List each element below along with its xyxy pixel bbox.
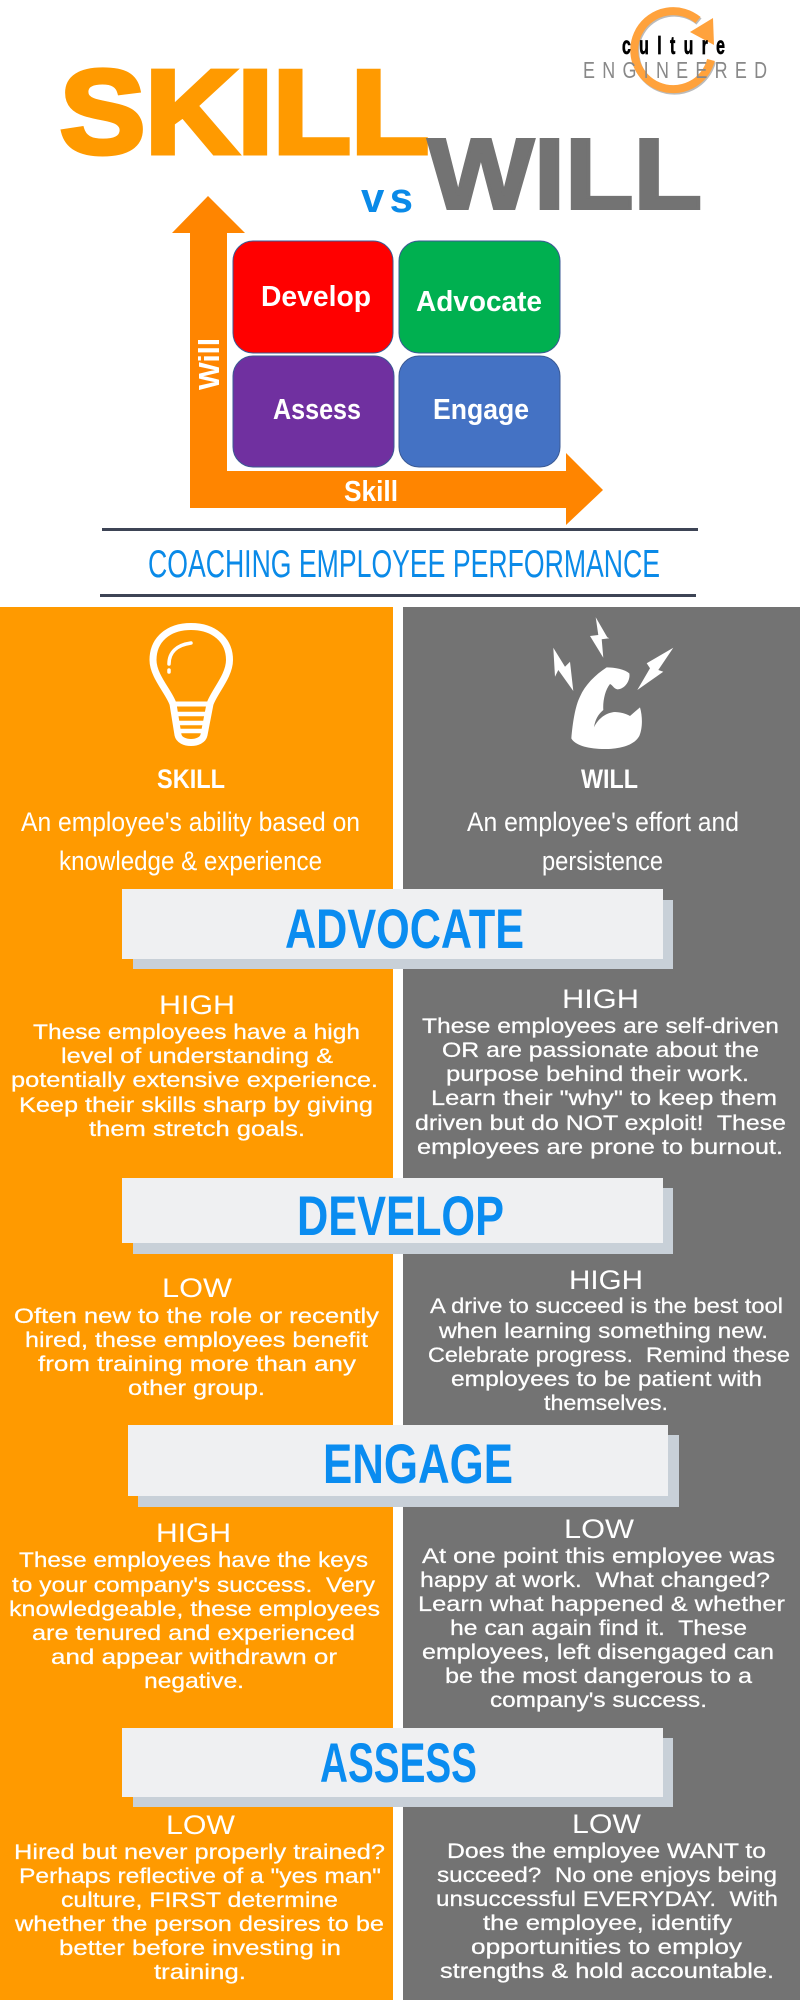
- text: develop will high: A drive to succeed is the best tool: [430, 1294, 783, 1318]
- text: engage will low: company's success.: [490, 1688, 707, 1712]
- text: assess will low: succeed? No one enjoys being: [437, 1863, 777, 1887]
- text: advocate will high: These employees are self-driven: [422, 1014, 779, 1038]
- text: assess will low: the employee, identify: [483, 1911, 732, 1935]
- text: engage will low: he can again find it. These: [450, 1616, 747, 1640]
- text: advocate skill high: them stretch goals.: [89, 1117, 305, 1141]
- banner: ASSESS: ASSESS: [320, 1731, 477, 1794]
- text: develop will high: when learning something new.: [438, 1319, 768, 1343]
- text: advocate will high: purpose behind their work.: [446, 1062, 749, 1086]
- title: WILL: WILL: [428, 118, 702, 230]
- text: engage skill high: are tenured and experienced: [32, 1621, 355, 1645]
- text: assess will low: opportunities to employ: [471, 1935, 742, 1959]
- text: skill definition: knowledge & experience: [59, 846, 322, 876]
- banner: ASSESS: [122, 1728, 673, 1807]
- text: engage will low: employees, left disengaged can: [422, 1640, 774, 1664]
- text: skill definition: An employee's ability based on: [21, 807, 360, 837]
- text: develop skill low: other group.: [128, 1376, 265, 1400]
- title: SKILL: SKILL: [60, 46, 429, 179]
- quadrant: Advocate: [399, 241, 560, 353]
- text: assess skill low: culture, FIRST determine: [61, 1888, 338, 1912]
- text: develop skill low: from training more than any: [38, 1352, 356, 1376]
- text: assess skill low: [14, 1810, 385, 1984]
- text: assess skill low: Perhaps reflective of a "yes man": [19, 1864, 381, 1888]
- text: develop will high: Celebrate progress. Remind these: [428, 1343, 790, 1367]
- text: engage skill high: [9, 1518, 380, 1693]
- icon: light bulb: [153, 626, 230, 742]
- text: engage will low: LOW: [564, 1514, 635, 1544]
- text: engage will low: happy at work. What changed?: [420, 1568, 770, 1592]
- text: engage skill high: and appear withdrawn or: [51, 1645, 337, 1669]
- text: engage will low: be the most dangerous to a: [445, 1664, 752, 1688]
- text: advocate will high: Learn their "why" to keep them: [431, 1086, 777, 1110]
- quadrant: Engage: Engage: [433, 394, 529, 426]
- panel: will column: [403, 607, 800, 2000]
- text: develop will high: employees to be patient with: [451, 1367, 762, 1391]
- text: assess will low: unsuccessful EVERYDAY. With: [436, 1887, 778, 1911]
- quadrant: Develop: [233, 241, 393, 353]
- text: engage skill high: These employees have the keys: [19, 1548, 368, 1572]
- text: assess will low: strengths & hold accountable.: [440, 1959, 774, 1983]
- logo: Culture Engineered: [583, 11, 767, 91]
- text: will definition: [467, 807, 739, 876]
- banner: DEVELOP: [122, 1178, 673, 1254]
- text: develop will high: HIGH: [569, 1265, 643, 1295]
- text: develop will high: [428, 1265, 790, 1415]
- text: develop will high: themselves.: [544, 1391, 668, 1415]
- axis label: Skill: Skill: [344, 476, 398, 508]
- text: skill definition: [21, 807, 360, 876]
- text: advocate skill high: These employees have a high: [33, 1020, 360, 1044]
- text: engage will low: Learn what happened & whether: [418, 1592, 785, 1616]
- text: engage skill high: to your company's success. Very: [12, 1573, 375, 1597]
- logo: Culture Engineered: ENGINEERED: [583, 58, 767, 84]
- quadrant: Develop: Develop: [261, 281, 371, 313]
- text: engage skill high: negative.: [144, 1669, 244, 1693]
- text: assess skill low: Hired but never properly trained?: [14, 1840, 385, 1864]
- text: assess will low: [436, 1809, 778, 1983]
- text: assess skill low: LOW: [166, 1810, 236, 1840]
- quadrant: Assess: Assess: [273, 394, 361, 426]
- icon: flexed muscle: [553, 617, 673, 749]
- quadrant: Assess: [233, 356, 394, 467]
- text: develop skill low: LOW: [162, 1273, 233, 1303]
- text: engage will low: [418, 1514, 785, 1712]
- text: will definition: An employee's effort and: [467, 807, 739, 837]
- quadrant: Advocate: Advocate: [416, 286, 542, 318]
- text: develop skill low: hired, these employees benefit: [25, 1328, 368, 1352]
- chart: skill will matrix: [172, 196, 603, 525]
- text: advocate will high: HIGH: [562, 984, 639, 1014]
- text: develop skill low: Often new to the role or recently: [14, 1304, 379, 1328]
- quadrant: Engage: [399, 356, 560, 467]
- text: advocate skill high: potentially extensive experience.: [11, 1068, 378, 1092]
- text: assess skill low: whether the person desires to be: [14, 1912, 384, 1936]
- text: advocate skill high: [11, 990, 378, 1141]
- banner: ENGAGE: [128, 1425, 679, 1507]
- text: will definition: persistence: [542, 846, 663, 876]
- text: assess will low: LOW: [572, 1809, 642, 1839]
- text: assess skill low: better before investing in: [59, 1936, 341, 1960]
- axis label: Will: Will: [194, 338, 226, 390]
- text: engage skill high: knowledgeable, these employees: [9, 1597, 380, 1621]
- text: engage will low: At one point this employee was: [422, 1544, 775, 1568]
- banner: ADVOCATE: ADVOCATE: [285, 897, 524, 960]
- text: advocate will high: driven but do NOT exploit! These: [415, 1111, 786, 1135]
- text: engage skill high: HIGH: [156, 1518, 231, 1548]
- text: advocate skill high: level of understanding &: [61, 1044, 333, 1068]
- text: advocate will high: [415, 984, 786, 1159]
- text: develop skill low: [14, 1273, 379, 1400]
- heading: WILL: WILL: [581, 764, 638, 794]
- heading: SKILL: SKILL: [157, 764, 225, 794]
- text: assess will low: Does the employee WANT to: [447, 1839, 766, 1863]
- panel: skill column: [0, 607, 393, 2000]
- text: advocate skill high: Keep their skills sharp by giving: [19, 1093, 373, 1117]
- banner: ENGAGE: ENGAGE: [323, 1432, 513, 1495]
- title: vs: v s: [361, 174, 413, 221]
- text: advocate will high: OR are passionate about the: [442, 1038, 759, 1062]
- text: advocate skill high: HIGH: [159, 990, 235, 1020]
- text: assess skill low: training.: [154, 1960, 246, 1984]
- logo: Culture Engineered: culture: [622, 33, 725, 60]
- arrow: axes: [172, 196, 603, 525]
- text: advocate will high: employees are prone to burnout.: [417, 1135, 783, 1159]
- banner: ADVOCATE: [122, 889, 673, 969]
- banner: DEVELOP: DEVELOP: [297, 1184, 504, 1247]
